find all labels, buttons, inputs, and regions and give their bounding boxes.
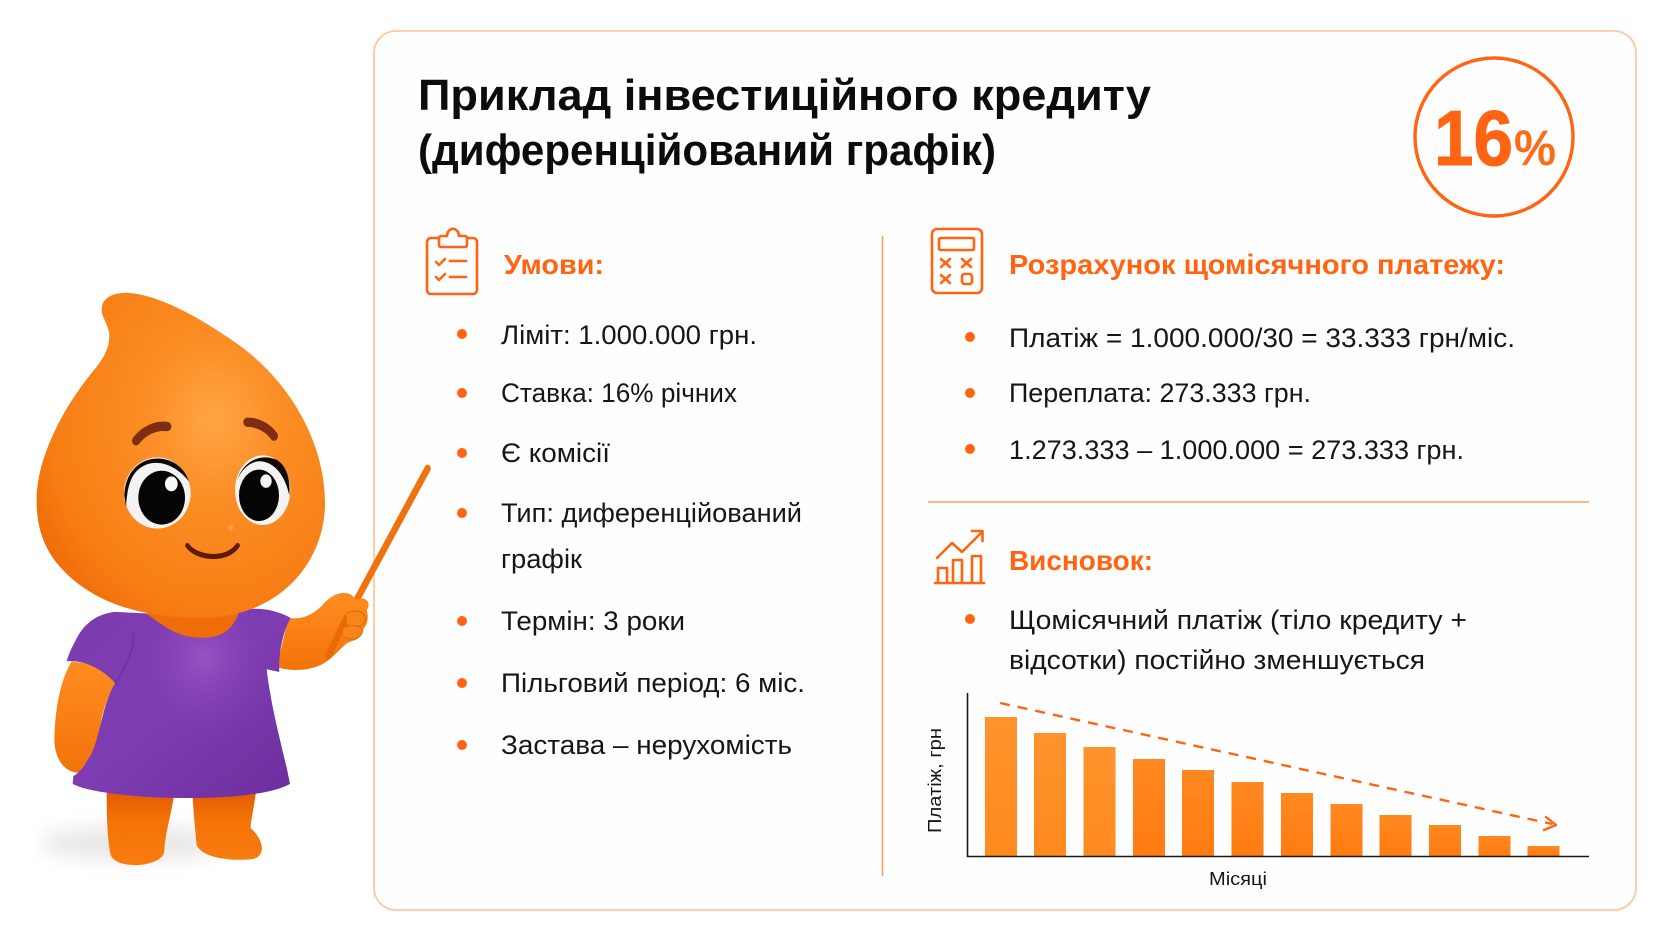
rate badge: 16%: 16 <box>1434 94 1513 182</box>
conditions list: Термін: 3 роки <box>501 606 685 636</box>
conditions list: Застава – нерухомість <box>501 730 792 760</box>
mouth <box>187 546 238 557</box>
title: (диференційований графік) <box>418 126 996 175</box>
eyebrows <box>136 426 167 441</box>
bars <box>985 717 1560 856</box>
section divider <box>928 501 1589 503</box>
heading: conclusion: Висновок: <box>1009 545 1153 576</box>
conclusion text: відсотки) постійно зменшується <box>1009 645 1425 675</box>
neckline <box>147 613 239 638</box>
right arm and hand <box>277 593 369 670</box>
ground shadow <box>40 825 227 861</box>
panel: monthly payment calculation <box>932 229 1515 465</box>
calculation list <box>965 323 1515 465</box>
trend arrow <box>1000 703 1556 830</box>
sleeve fold <box>115 634 133 683</box>
heading: monthly payment: Розрахунок щомісячного платежу: <box>1009 249 1505 280</box>
left arm <box>54 661 115 773</box>
pointer stick lower end <box>328 618 347 655</box>
panel: conclusion <box>935 531 1467 675</box>
conditions list: Тип: диференційований <box>501 498 802 528</box>
conditions list: Пільговий період: 6 міс. <box>501 668 805 698</box>
conditions list <box>457 320 805 760</box>
calculation list: Платіж = 1.000.000/30 = 33.333 грн/міс. <box>1009 323 1515 353</box>
title <box>418 71 1152 175</box>
left leg <box>107 792 174 865</box>
right leg <box>193 792 262 860</box>
icon: growth chart <box>935 531 984 583</box>
heading: conditions: Умови: <box>504 249 604 280</box>
conditions list: Ставка: 16% річних <box>501 378 737 408</box>
right eye <box>235 455 290 525</box>
conclusion text <box>965 605 1467 675</box>
rate badge: 16% <box>1415 58 1573 216</box>
x axis label: Місяці <box>1209 869 1267 889</box>
icon: calculator <box>932 229 982 293</box>
conditions list: Ліміт: 1.000.000 грн. <box>501 320 757 350</box>
rate badge: 16%: % <box>1514 120 1556 176</box>
conditions list: Є комісії <box>501 438 611 468</box>
axes <box>968 693 1589 856</box>
bar chart: decreasing payment <box>925 693 1589 889</box>
pointer stick <box>353 468 428 606</box>
droplet head <box>37 293 325 618</box>
conditions list: графік <box>501 544 582 574</box>
mascot: orange droplet character with pointer <box>37 293 428 865</box>
purple dress <box>67 609 291 798</box>
title: Приклад інвестиційного кредиту <box>418 71 1152 120</box>
conclusion text: Щомісячний платіж (тіло кредиту + <box>1009 605 1467 635</box>
left eye <box>124 457 191 529</box>
calculation list: Переплата: 273.333 грн. <box>1009 378 1311 408</box>
icon: clipboard checklist <box>427 229 477 294</box>
calculation list: 1.273.333 – 1.000.000 = 273.333 грн. <box>1009 435 1464 465</box>
y axis label: Платіж, грн <box>925 728 945 833</box>
panel: conditions <box>427 229 805 760</box>
fingers <box>347 611 366 627</box>
main card panel <box>374 31 1636 910</box>
column divider <box>882 236 884 876</box>
